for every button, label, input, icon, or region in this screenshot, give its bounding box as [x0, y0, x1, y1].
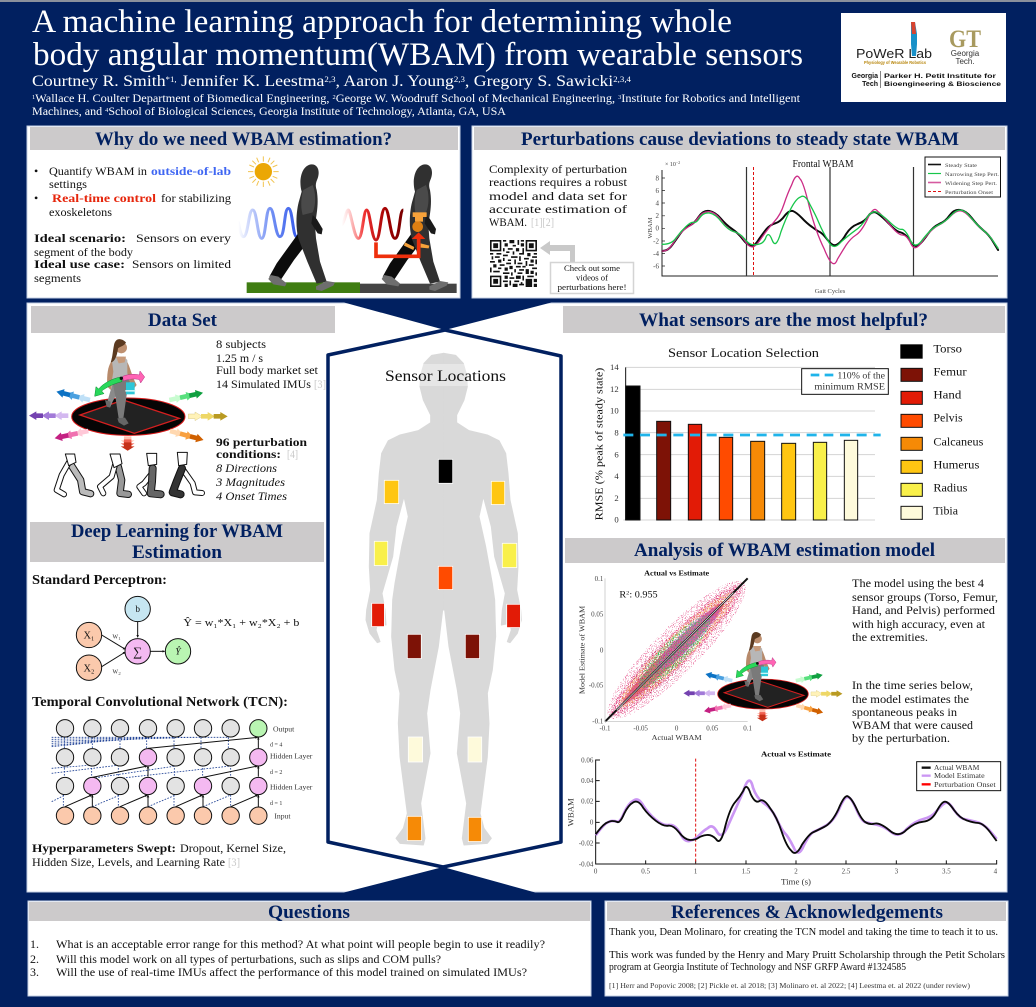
- question list: 2.: [30, 952, 39, 966]
- walker: right: [382, 164, 448, 291]
- affiliations: 1: [32, 95, 35, 101]
- heading: Deep Learning for WBAM: [71, 521, 283, 542]
- x tick labels: 3.5: [942, 868, 951, 876]
- axis labels: Actual WBAM: [652, 733, 702, 742]
- panel: references and acknowledgements: [605, 901, 1008, 996]
- heading: What sensors are the most helpful?: [639, 310, 928, 331]
- node: b: b: [135, 605, 140, 615]
- acknowledgement text: program at Georgia Institute of Technology and NSF GRFP Award #1324585: [609, 962, 906, 973]
- analysis text: The model using the best 4: [852, 576, 984, 590]
- color legend: [900, 344, 983, 519]
- panel: perturbations cause deviations: [472, 126, 1007, 298]
- analysis text: Hand, and Pelvis) performed: [852, 603, 995, 617]
- exponent: × 10: [665, 162, 676, 168]
- tick labels: 6: [614, 449, 619, 459]
- hyperparameters: Hidden Size, Levels, and Learning Rate: [32, 855, 225, 869]
- perturbation onset: [752, 167, 754, 276]
- description text: Complexity of perturbation: [489, 162, 627, 176]
- bullet text: for stabilizing: [161, 191, 231, 205]
- icon: sun: [248, 156, 279, 187]
- layer labels: Hidden Layer: [270, 783, 313, 792]
- sensor: hand: [372, 603, 520, 628]
- y tick labels: 0.06: [581, 756, 594, 764]
- illustration: treadmill with perturbation arrows: [29, 339, 228, 451]
- y ticks: -2: [653, 238, 659, 246]
- affiliations: [32, 93, 801, 118]
- perturbation conditions: 3 Magnitudes: [215, 475, 285, 489]
- r squared: : 0.955: [629, 590, 658, 600]
- logos: [841, 13, 1006, 102]
- perturbation conditions: 96 perturbation: [216, 435, 307, 449]
- y ticks: 4: [656, 200, 660, 208]
- solid connections: [65, 737, 258, 807]
- question list: Will this model work on all types of perturbations, such as slips and COM pulls?: [56, 952, 441, 966]
- bullet text: outside-of-lab: [151, 164, 231, 178]
- time series text: spontaneous peaks in: [852, 705, 957, 719]
- identity line: [605, 578, 748, 722]
- affiliations: School of Biological Sciences, Georgia Institute of Technology, Atlanta, GA, USA: [108, 106, 507, 118]
- panel: questions: [28, 901, 591, 996]
- color legend: Hand: [933, 390, 962, 402]
- bullet text: [34, 164, 231, 219]
- tick labels: 0: [675, 724, 679, 732]
- node: b: [125, 596, 150, 622]
- logos: Parker H. Petit Institute for: [884, 73, 997, 80]
- r squared: 2: [626, 591, 630, 597]
- legend: Model Estimate: [934, 772, 985, 780]
- callout: [550, 262, 634, 294]
- gridlines: [623, 367, 875, 520]
- affiliations: 4: [105, 108, 108, 114]
- hyperparameters: [32, 841, 286, 869]
- body silhouette: [366, 353, 521, 845]
- ground: [247, 282, 457, 293]
- perturbation conditions: 8 Directions: [216, 461, 277, 475]
- ideal scenario text: segments: [34, 271, 81, 285]
- ideal scenario text: segment of the body: [34, 245, 133, 259]
- legend: [925, 157, 1000, 197]
- question list: [30, 937, 545, 979]
- threshold legend: minimum RMSE: [814, 383, 885, 393]
- x tick labels: 1.5: [742, 868, 751, 876]
- axes: [596, 760, 997, 864]
- y label: WBAM: [647, 217, 654, 238]
- legend: Actual WBAM: [934, 764, 979, 772]
- leg pose 1: [57, 454, 91, 494]
- scatter points: [593, 567, 760, 733]
- analysis text: the extremities.: [852, 630, 928, 644]
- y tick labels: 0.04: [581, 777, 594, 785]
- authors: *1,: [166, 75, 177, 84]
- y axis label: RMSE (% peak of steady state): [593, 367, 605, 520]
- acknowledgement text: This work was funded by the Henry and Mary Pruitt Scholarship through the Petit Scholars: [609, 950, 1005, 961]
- description text: model and data set for: [489, 189, 627, 203]
- layer labels: Input: [274, 811, 291, 820]
- curves: [662, 176, 998, 264]
- panel: data set: [29, 306, 335, 503]
- sensor: humerus: [384, 480, 505, 505]
- center notch top: [335, 300, 561, 330]
- tick labels: 8: [614, 427, 619, 437]
- affiliations: George W. Woodruff School of Mechanical Engineering,: [336, 93, 618, 105]
- diagram: perceptron: [76, 596, 299, 680]
- tick labels: 0: [614, 515, 619, 525]
- scatter title: Actual vs Estimate: [644, 570, 709, 578]
- weight labels: w₁: [112, 632, 121, 641]
- data set notes: Full body market set: [216, 363, 319, 377]
- x tick labels: 0.5: [641, 868, 651, 876]
- description text: WBAM.: [489, 215, 527, 229]
- data set notes: 1.25 m / s: [216, 351, 263, 365]
- y tick labels: -0.04: [579, 860, 594, 868]
- series: steady state: [662, 210, 998, 251]
- data set notes: [216, 337, 326, 391]
- legend: Steady State: [945, 163, 978, 169]
- color legend: Femur: [933, 367, 967, 379]
- time series chart: [566, 751, 1001, 887]
- heading: [29, 902, 590, 923]
- tick labels: 4: [614, 471, 619, 481]
- layer labels: [270, 725, 313, 820]
- logos: Tech.: [955, 57, 975, 66]
- axes: [662, 170, 998, 276]
- perturbation conditions: [4]: [287, 447, 298, 461]
- y ticks: -4: [653, 250, 659, 258]
- y tick labels: 0.02: [581, 798, 594, 806]
- perturbation conditions: [215, 435, 307, 503]
- arrow: red control: [376, 237, 419, 256]
- illustration: treadmill repeat: [683, 632, 842, 721]
- x tick labels: 0: [594, 868, 598, 876]
- question list: Will the use of real-time IMUs affect the performance of this model trained on simulated IMUs?: [56, 965, 527, 979]
- data set notes: 14 Simulated IMUs: [216, 377, 311, 391]
- bullet text: •: [34, 191, 38, 205]
- gait lines: [746, 167, 914, 276]
- chart title: Actual vs Estimate: [761, 751, 831, 759]
- affiliations: 3: [618, 95, 621, 101]
- authors: , Aaron J. Young: [336, 73, 454, 90]
- description text: reactions requires a robust: [489, 175, 628, 189]
- heading: Perturbations cause deviations to steady state WBAM: [521, 129, 959, 150]
- subheading: perceptron: Standard Perceptron:: [32, 572, 167, 587]
- callout: Check out some: [564, 264, 620, 273]
- heading: Data Set: [148, 310, 218, 331]
- legend: Perturbation Onset: [934, 781, 996, 789]
- heading: sensor locations: [331, 364, 559, 386]
- hyperparameters: [3]: [228, 855, 240, 869]
- data set notes: 8 subjects: [216, 337, 266, 351]
- logos: PoWeR Lab: [856, 46, 932, 61]
- x tick labels: 2: [794, 868, 798, 876]
- authors: , Gregory S. Sawicki: [465, 73, 614, 90]
- node: sum: ∑: [133, 645, 142, 659]
- QR code: [490, 240, 537, 287]
- threshold legend: [802, 369, 888, 394]
- bullet text: Quantify WBAM in: [49, 164, 147, 178]
- hyperparameters: Dropout, Kernel Size,: [180, 841, 286, 855]
- ideal scenario text: [34, 231, 231, 285]
- y ticks: -6: [653, 262, 659, 270]
- tick labels: 0.05: [591, 611, 604, 619]
- scatter plot: Model Estimate of WBAM: [577, 606, 586, 694]
- x tick labels: 4: [994, 868, 998, 876]
- node: X1: [76, 622, 102, 648]
- tick labels: 0.1: [595, 575, 604, 583]
- x tick labels: 3: [895, 868, 899, 876]
- data set notes: [3]: [314, 377, 326, 391]
- color legend: Humerus: [933, 460, 979, 472]
- description text: [489, 162, 628, 229]
- heading: [607, 902, 1006, 923]
- color legend: Tibia: [933, 505, 958, 517]
- heading: References & Acknowledgements: [671, 902, 943, 923]
- callout: perturbations here!: [558, 283, 626, 292]
- sensors: [372, 459, 520, 842]
- sensor: pelvis: [438, 566, 453, 590]
- authors: 2,3: [454, 75, 465, 84]
- authors: 2,3,4: [613, 75, 631, 84]
- series: widening step: [662, 176, 998, 264]
- y tick labels: -0.02: [579, 839, 594, 847]
- node: X1: X₁: [83, 631, 95, 642]
- ideal scenario text: Sensors on limited: [132, 257, 231, 271]
- icon: GT monogram: GT: [949, 26, 981, 53]
- icon: power lab leg: [911, 22, 917, 56]
- logos: Bioengineering & Bioscience: [884, 81, 1001, 88]
- y ticks: 6: [656, 187, 660, 195]
- tick labels: -0.05: [589, 682, 604, 690]
- threshold line: [623, 431, 881, 439]
- exoskeleton: orange: [404, 212, 429, 250]
- sensor: tibia: [408, 737, 482, 762]
- question list: 1.: [30, 937, 39, 951]
- description text: accurate estimation of: [489, 202, 627, 216]
- panel: what sensors are the most helpful: [563, 306, 1005, 525]
- logos: Georgia: [951, 49, 980, 58]
- node: X2: X₂: [83, 663, 95, 674]
- bullet text: •: [34, 164, 38, 178]
- title header: [32, 4, 1006, 118]
- time series text: WBAM that were caused: [852, 718, 973, 732]
- callout: videos of: [576, 274, 608, 282]
- analysis text: with high accuracy, even at: [852, 617, 986, 631]
- legend: Narrowing Step Pert.: [945, 172, 1000, 178]
- panel: deep learning: [30, 521, 324, 869]
- node: output: [165, 639, 191, 664]
- color legend: Torso: [933, 344, 962, 356]
- x tick labels: 2.5: [842, 868, 851, 876]
- y ticks: 8: [656, 174, 660, 182]
- legend: [917, 762, 1001, 791]
- tick labels: [589, 575, 753, 732]
- dashed dilated connections: [52, 737, 231, 807]
- tick labels: -0.1: [599, 724, 611, 732]
- color legend: Pelvis: [933, 413, 963, 425]
- ideal scenario text: Ideal use case:: [34, 257, 125, 271]
- series: narrowing step: [662, 196, 998, 248]
- perturbation conditions: conditions:: [216, 447, 281, 461]
- layer labels: d = 2: [270, 770, 282, 776]
- equation: Ŷ = w₁*X₁ + w₂*X₂ + b: [183, 617, 299, 629]
- leg icons: [57, 452, 202, 494]
- wave: blue: [238, 208, 305, 238]
- heading: sensor locations: Sensor Locations: [385, 368, 506, 385]
- panel: main central area: [27, 300, 1007, 893]
- node: X2: [76, 655, 102, 680]
- node: sum: [125, 639, 150, 664]
- sensor: calcaneus: [407, 816, 482, 842]
- question list: 3.: [30, 965, 39, 979]
- legend: Widening Step Pert.: [945, 181, 998, 187]
- bullet text: Real-time control: [52, 191, 157, 205]
- tick labels: -0.05: [633, 724, 648, 732]
- tick labels: 0.05: [706, 724, 719, 732]
- chart title: Sensor Location Selection: [668, 345, 820, 360]
- analysis text: sensor groups (Torso, Femur,: [852, 590, 998, 604]
- title: body angular momentum(WBAM) from wearable sensors: [33, 37, 803, 73]
- heading: [30, 127, 458, 150]
- bars: [626, 386, 858, 520]
- time series text: the model estimates the: [852, 692, 969, 706]
- logos: Georgia: [852, 73, 878, 80]
- description text: [1][2]: [531, 215, 554, 229]
- heading: Why do we need WBAM estimation?: [95, 129, 392, 150]
- bullet text: exoskeletons: [49, 205, 112, 219]
- y tick labels: 0: [590, 819, 594, 827]
- time series text: by the perturbation.: [852, 731, 950, 745]
- authors: Jennifer K. Leestma: [177, 73, 324, 90]
- y tick labels: [579, 756, 594, 868]
- chart title: Frontal WBAM: [792, 159, 854, 170]
- color legend: Calcaneus: [933, 437, 983, 449]
- logos: Physiology of Wearable Robotics: [864, 60, 926, 65]
- sensor: radius: [374, 541, 517, 568]
- perturbation conditions: 4 Onset Times: [216, 489, 287, 503]
- hyperparameters: Hyperparameters Swept:: [32, 841, 176, 855]
- sensor: torso: [438, 459, 453, 483]
- treadmill disc: [72, 398, 185, 435]
- leg pose 3: [139, 453, 161, 494]
- analysis text: [852, 576, 998, 644]
- series: model estimate: [596, 781, 997, 853]
- node: output: Ŷ: [175, 646, 182, 658]
- center notch bottom: [342, 867, 537, 893]
- layer labels: d = 1: [270, 801, 282, 807]
- affiliations: Machines, and: [32, 106, 99, 118]
- acknowledgement text: Thank you, Dean Molinaro, for creating the TCN model and taking the time to teach it to us.: [609, 927, 998, 938]
- threshold legend: 110% of the: [837, 371, 885, 382]
- diagram: TCN: [52, 720, 313, 824]
- affiliations: Wallace H. Coulter Department of Biomedical Engineering,: [35, 93, 333, 105]
- tick labels: 0: [600, 646, 604, 654]
- panel: why do we need WBAM estimation: [27, 126, 460, 298]
- authors: Courtney R. Smith: [32, 73, 152, 90]
- time series text: [852, 678, 973, 745]
- heading: Analysis of WBAM estimation model: [634, 540, 935, 561]
- acknowledgement text: [609, 927, 1005, 973]
- panel: sensor locations hexagon: [328, 330, 561, 867]
- time series chart: WBAM: [566, 798, 575, 826]
- color legend: Radius: [933, 482, 967, 494]
- title: [32, 4, 803, 73]
- perturbation onset: [694, 759, 697, 864]
- layer labels: d = 4: [270, 743, 282, 749]
- subheading: TCN: Temporal Convolutional Network (TCN):: [32, 694, 288, 709]
- wave: red: [342, 208, 403, 240]
- tick labels: [610, 362, 619, 525]
- tick labels: 2: [614, 493, 619, 503]
- heading: [565, 538, 1005, 563]
- axis labels: Time (s): [781, 878, 811, 887]
- heading: [31, 306, 335, 333]
- axes: [605, 578, 748, 722]
- tick labels: 14: [610, 362, 619, 372]
- y ticks: 0: [656, 224, 660, 232]
- tick labels: 0.1: [743, 724, 753, 732]
- question list: What is an acceptable error range for this method? At what point will people begin to use it readily?: [56, 937, 545, 951]
- scatter plot: [577, 567, 760, 742]
- ideal scenario text: Ideal scenario:: [34, 231, 126, 245]
- connections: [102, 622, 165, 667]
- legend: Perturbation Onset: [945, 190, 994, 196]
- arrow: to QR: [540, 241, 575, 262]
- line chart: frontal WBAM: [647, 157, 1000, 295]
- heading: [563, 306, 1005, 333]
- illustration: walkers: [238, 156, 457, 293]
- panel: analysis of WBAM estimation model: [565, 538, 1005, 887]
- diagram: perceptron: w₂: [112, 666, 121, 675]
- perturbation arrows: [29, 387, 228, 451]
- hexagon outline: [328, 330, 561, 867]
- heading: Questions: [268, 902, 350, 923]
- heading: Estimation: [132, 542, 222, 563]
- r squared: R: [619, 590, 625, 600]
- ideal scenario text: Sensors on every: [136, 231, 231, 245]
- tick labels: 10: [610, 406, 619, 416]
- title: A machine learning approach for determining whole: [32, 4, 732, 40]
- tick labels: -0.1: [592, 718, 604, 726]
- nodes: [56, 720, 267, 824]
- affiliations: Institute for Robotics and Intelligent: [621, 93, 801, 105]
- x label: Gait Cycles: [815, 288, 846, 295]
- leg pose 2: [100, 454, 128, 494]
- logos: Tech: [862, 81, 878, 88]
- y ticks: 2: [656, 212, 660, 220]
- references: [1] Herr and Popovic 2008; [2] Pickle et. al 2018; [3] Molinaro et. al 2022; [4] Leestma et. al 2022 (under review): [609, 981, 971, 990]
- x tick labels: 1: [694, 868, 698, 876]
- leg pose 4: [173, 452, 202, 494]
- y ticks: [653, 174, 665, 270]
- tick labels: 12: [610, 384, 619, 394]
- series: actual: [596, 787, 997, 853]
- walker: left: [268, 164, 335, 291]
- affiliations: 2: [333, 95, 336, 101]
- exponent: −2: [676, 160, 680, 165]
- layer labels: Output: [273, 725, 295, 734]
- bar chart: [593, 344, 983, 525]
- time series text: In the time series below,: [852, 678, 973, 692]
- layer labels: Hidden Layer: [270, 752, 313, 761]
- bullet text: settings: [49, 177, 87, 191]
- sensor: femur: [407, 634, 480, 659]
- x tick labels: [594, 868, 998, 876]
- person walking: [95, 339, 145, 426]
- heading: [30, 521, 324, 563]
- authors: 2,3: [324, 75, 336, 84]
